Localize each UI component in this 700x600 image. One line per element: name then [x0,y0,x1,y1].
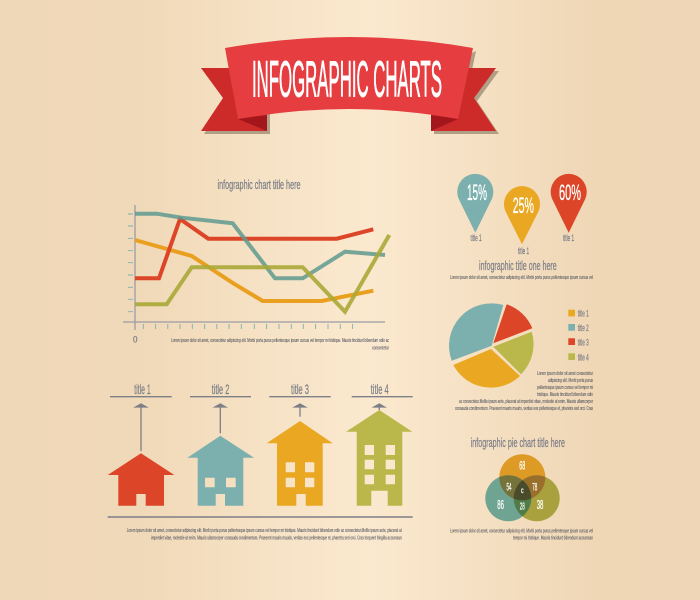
line series: red [135,219,373,278]
line series: olive [135,235,389,312]
banner shadow [204,51,499,134]
pin 60%: 60% [559,180,581,205]
pin 25%: 25% [513,193,534,218]
house chart caption: Lorem ipsum dolor sit amet, consectetur adipiscing elit. Morbi porta purus pellentesque ipsum cursus vel tempor mi tristique. Mauris tincidunt bibendum odio ac consectetur.Mollis ipsum ante, placerat at [127,528,402,534]
pin 60% [551,174,587,243]
pie chart [449,303,534,388]
house column 4: title 4 [371,381,389,397]
house 3 [267,421,333,506]
pin section title: infographic title one here [479,258,557,273]
pin 15% [457,174,493,243]
pin 25%: title 1 [518,246,529,256]
line chart panel [123,177,389,352]
arrow 4 [374,404,385,410]
overlap: centre [514,480,532,500]
text: title 3 [578,338,589,348]
text: title 4 [578,352,589,364]
left ribbon fold [238,115,267,131]
pin 25% [504,186,540,256]
slice: red [493,304,532,343]
venn caption [450,528,593,542]
overlap: orange and olive [522,475,546,498]
pie caption: Lorem ipsum dolor sit amet consectetur [537,371,593,377]
venn diagram [450,435,593,542]
pie caption: tristique. Mauris tincidunt bibendum odio [537,392,593,398]
house column 4 [346,381,413,506]
line chart caption: Lorem ipsum dolor sit amet, consectetur adipiscing elit. Morbi porta purus pellentesque ipsum cursus vel tempor mi tristique. Mauris tincidunt bibendum odio ac [171,338,389,344]
house 1 [108,453,174,506]
pie caption: consauda condimentum. Praesent mauris mauris, veritas eos pellentesque et, pharetra sed orci. Cras [455,406,593,412]
house column 2: title 2 [212,381,229,397]
left ribbon tail [201,68,267,131]
banner body [225,37,473,119]
line series: green [135,214,385,278]
arrow 3 [295,404,305,417]
arrow 2 [215,404,226,433]
right ribbon fold [431,115,458,131]
right ribbon tail [431,68,496,131]
house column 1 [108,381,174,506]
venn circle: olive [514,475,560,521]
house chart baseline [108,516,413,518]
slice: orange [453,349,520,388]
chart axes [123,205,385,330]
slice: olive [493,332,534,374]
pie legend [568,308,589,364]
pie caption [455,371,593,412]
arrow 1 [136,404,146,451]
house 2 [187,436,254,506]
slice: teal [449,303,503,361]
line chart caption: consectetur [372,346,389,352]
venn values: 28 [520,502,525,512]
pin 15%: title 1 [470,233,482,243]
venn values: 86 [497,497,504,512]
line chart title: infographic chart title here [218,177,300,192]
pie caption: pellentesque ipsum cursus vel tempor mi [537,385,593,391]
venn values: 54 [506,482,512,494]
overlap: teal and olive [514,480,532,516]
venn caption: tempor mi tristique. Mauris tincidunt bibendum accumsan [513,536,593,542]
venn values: 78 [532,482,537,494]
house column 1: title 1 [134,381,151,397]
house chart [108,381,413,542]
venn circle: orange [499,454,545,500]
axis ticks [128,214,353,329]
venn values: 68 [519,458,525,472]
house 4 [346,410,412,506]
house chart caption: imperdiet vitae, molestie at enim. Mauris ullamcorper consauda condimentum. Praesent mauris mauris, veritas eos pellentesque et, pharetra sed orci. Cras torquent fringilla accumsan [151,536,402,542]
pie caption: adipiscing elit. Morbi porta purus [548,378,593,384]
house column 3: title 3 [291,381,309,397]
map pin percentages [450,174,593,281]
text: title 1 [578,308,589,320]
overlap: orange and teal [499,475,522,498]
text: title 2 [578,323,589,334]
house column 2 [187,381,254,506]
venn section title: infographic pie chart title here [471,435,565,450]
venn diagram: 38 [537,497,543,512]
venn values [497,458,543,512]
pin 60%: title 1 [563,233,574,243]
line series: orange [135,240,373,301]
axis zero label: 0 [133,334,138,346]
venn circle: teal [485,475,531,521]
house chart caption [127,528,402,542]
pie caption: ac consectetur.Mollis ipsum ante, placerat at imperdiet vitae, molestie at enim. Mauris ullamcorper [459,399,593,405]
house column 3 [267,381,333,506]
line chart caption [171,338,389,352]
venn values: c [521,486,524,495]
title banner [201,37,499,134]
pin 15%: 15% [467,180,487,205]
